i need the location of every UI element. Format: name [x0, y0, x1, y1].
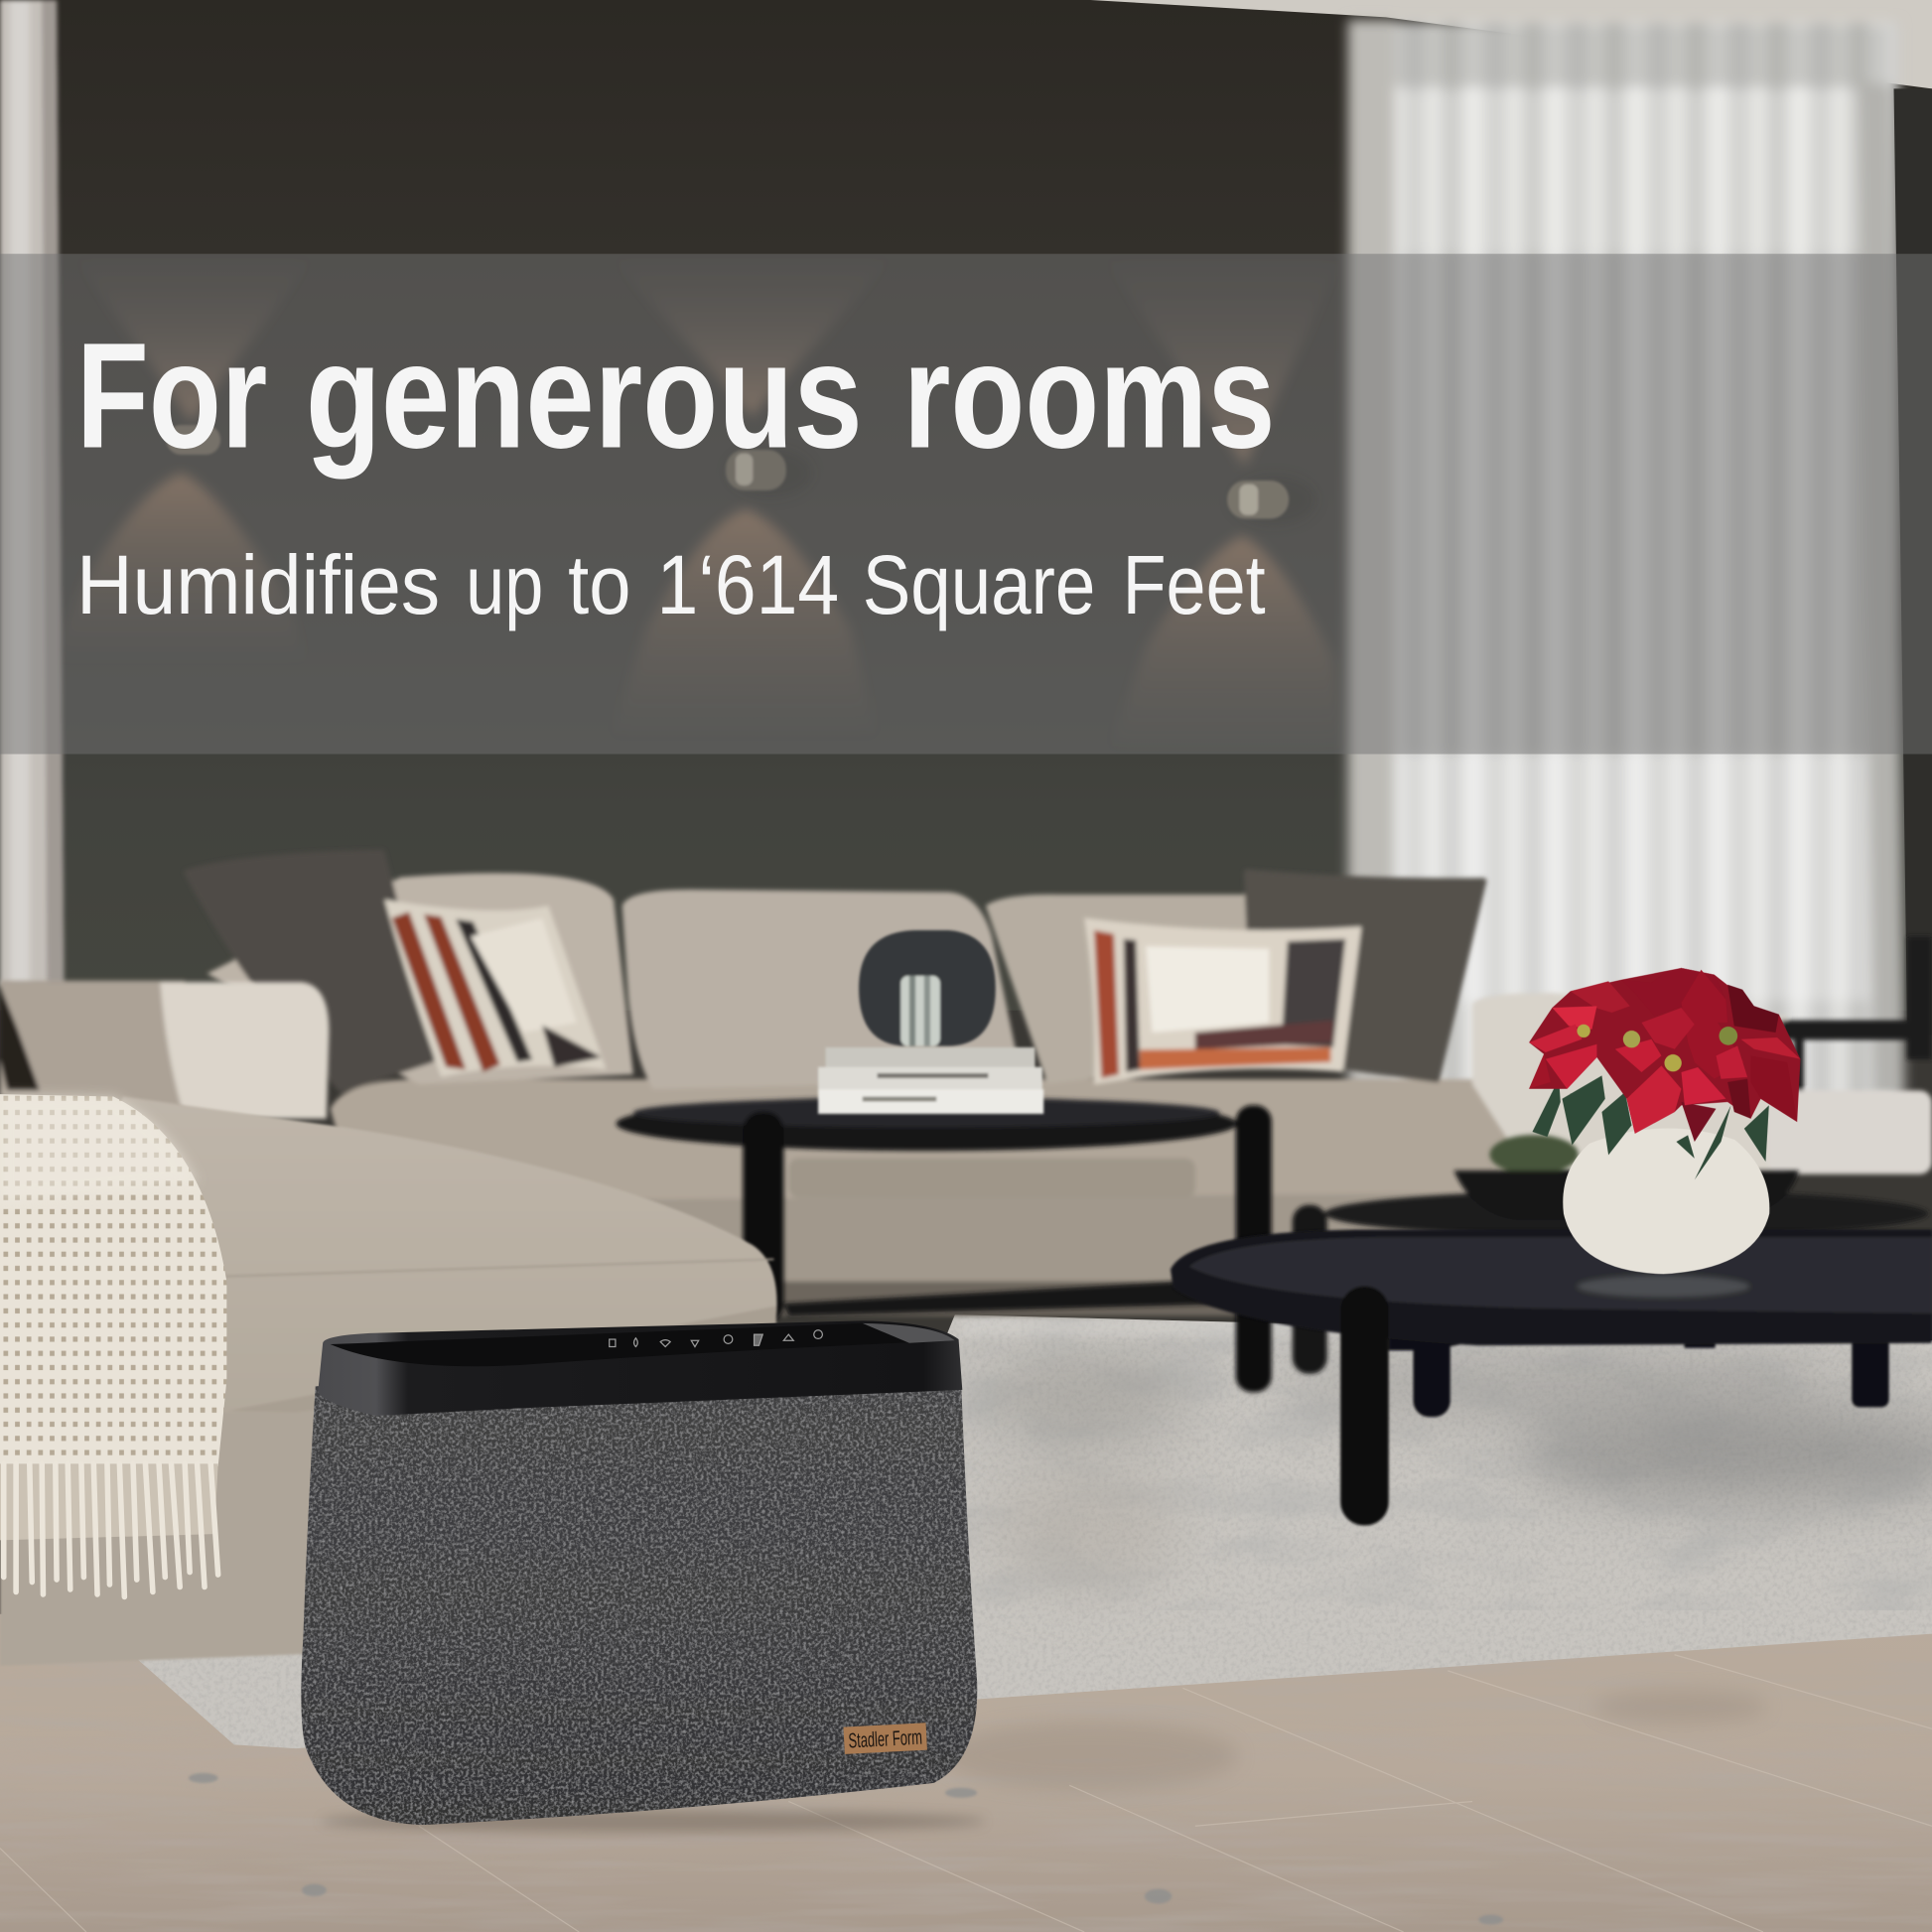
- headline: rooms: [903, 313, 1276, 481]
- striped pillow left: [384, 899, 607, 1077]
- sectional sofa back: [188, 853, 1932, 1315]
- sofa seats: [331, 1079, 1532, 1201]
- far round table and plant bowl: [1293, 1135, 1928, 1374]
- brand label: [843, 1723, 927, 1754]
- armchair cushion: [1768, 1090, 1932, 1174]
- waffle throw blanket: [0, 1094, 226, 1596]
- humidifier: [301, 1320, 977, 1825]
- window wall edge: [1894, 88, 1932, 1035]
- armchair frame: [1780, 936, 1932, 1102]
- sofa chaise foreground: [0, 1097, 777, 1666]
- window curtain: [1348, 20, 1905, 1106]
- subheading: Humidifies: [76, 538, 440, 631]
- rear coffee table: [617, 1097, 1272, 1392]
- lantern: [859, 930, 996, 1046]
- throw fringe: [0, 1463, 218, 1596]
- flower centres: [1577, 1025, 1737, 1071]
- wood knots: [189, 1773, 1503, 1925]
- right sofa arm: [1472, 993, 1787, 1176]
- sofa base: [641, 1189, 1468, 1285]
- flower vase: [1563, 1128, 1769, 1274]
- headline: For: [76, 313, 267, 481]
- headline: generous: [306, 313, 863, 481]
- front round table: [1171, 1230, 1932, 1525]
- grey pillow left: [188, 853, 431, 1089]
- left sofa armrest: [0, 981, 329, 1119]
- middle back cushion: [622, 890, 1018, 1089]
- rug: [138, 1314, 1932, 1748]
- product shadow: [321, 1810, 986, 1832]
- leaves: [1532, 1075, 1769, 1179]
- petals: [1529, 968, 1800, 1142]
- subheading: up: [466, 538, 543, 631]
- left curtain: [0, 0, 65, 986]
- plank seams: [0, 1655, 1932, 1932]
- left back cushion: [207, 873, 633, 1084]
- grey pillow right: [1247, 873, 1483, 1079]
- control panel icons: [610, 1330, 822, 1346]
- felt body: [301, 1380, 977, 1825]
- ceiling: [1090, 0, 1932, 88]
- translucent text band: [0, 254, 1932, 755]
- subheading: Feet: [1123, 538, 1266, 631]
- wall lights: [90, 312, 1330, 685]
- flower mass: [1529, 968, 1800, 1134]
- floor: [0, 1614, 1932, 1932]
- poinsettia flowers: [1529, 968, 1800, 1179]
- subheading: Square: [863, 538, 1095, 631]
- subheading: to: [568, 538, 630, 631]
- top surface: [331, 1323, 955, 1366]
- back wall: [0, 0, 1932, 1011]
- subheading: 1‘614: [656, 538, 839, 631]
- brand label: Stadler Form: [848, 1726, 923, 1752]
- stack of books: [818, 1047, 1043, 1114]
- top band: [318, 1320, 962, 1416]
- striped pillow right: [1084, 918, 1361, 1084]
- right back cushion: [986, 895, 1251, 1084]
